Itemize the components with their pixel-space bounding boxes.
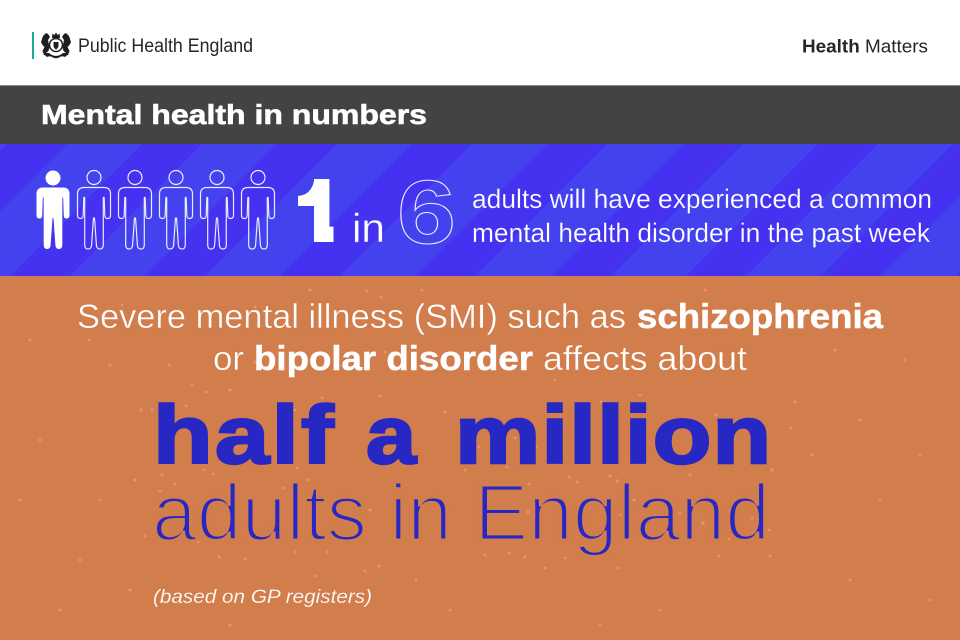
intro text: or (213, 340, 244, 378)
statistic text: mental health disorder in the past week (472, 218, 930, 248)
statistic text (472, 184, 932, 248)
number: 1 (298, 179, 334, 242)
speckle texture (28, 288, 922, 612)
title: Mental health in numbers (41, 99, 427, 130)
intro text: affects about (543, 340, 747, 378)
number: 1: 1 (295, 166, 341, 257)
headline: half a million (153, 389, 772, 481)
headline: half a million: half (153, 389, 336, 481)
word: in: in (352, 205, 385, 251)
headline: half a million: million (455, 389, 772, 480)
header label: Health Matters: Health Matters (802, 36, 928, 56)
intro text: Severe mental illness (SMI) such as (77, 298, 626, 336)
header background (0, 0, 960, 85)
logo: Public Health England: Public Health England (78, 36, 253, 57)
intro text (77, 298, 884, 378)
intro text: bipolar disorder (254, 340, 533, 378)
panel: severe mental illness (0, 276, 960, 640)
statistic text: adults will have experienced a common (472, 184, 932, 214)
panel: 1 in 6 statistic (0, 144, 960, 276)
icon: six people, one filled (36, 170, 274, 249)
number: 6 outlined: 6 (397, 163, 456, 263)
headline: half a million: a (366, 390, 417, 481)
logo: Public Health England (32, 32, 253, 59)
icon: royal coat of arms (41, 32, 71, 58)
footnote: (based on GP registers) (153, 586, 372, 608)
diagonal stripes (0, 144, 960, 276)
headline: adults in England: adults in England (152, 468, 770, 557)
title bar (0, 85, 960, 144)
intro text: schizophrenia (637, 298, 884, 336)
